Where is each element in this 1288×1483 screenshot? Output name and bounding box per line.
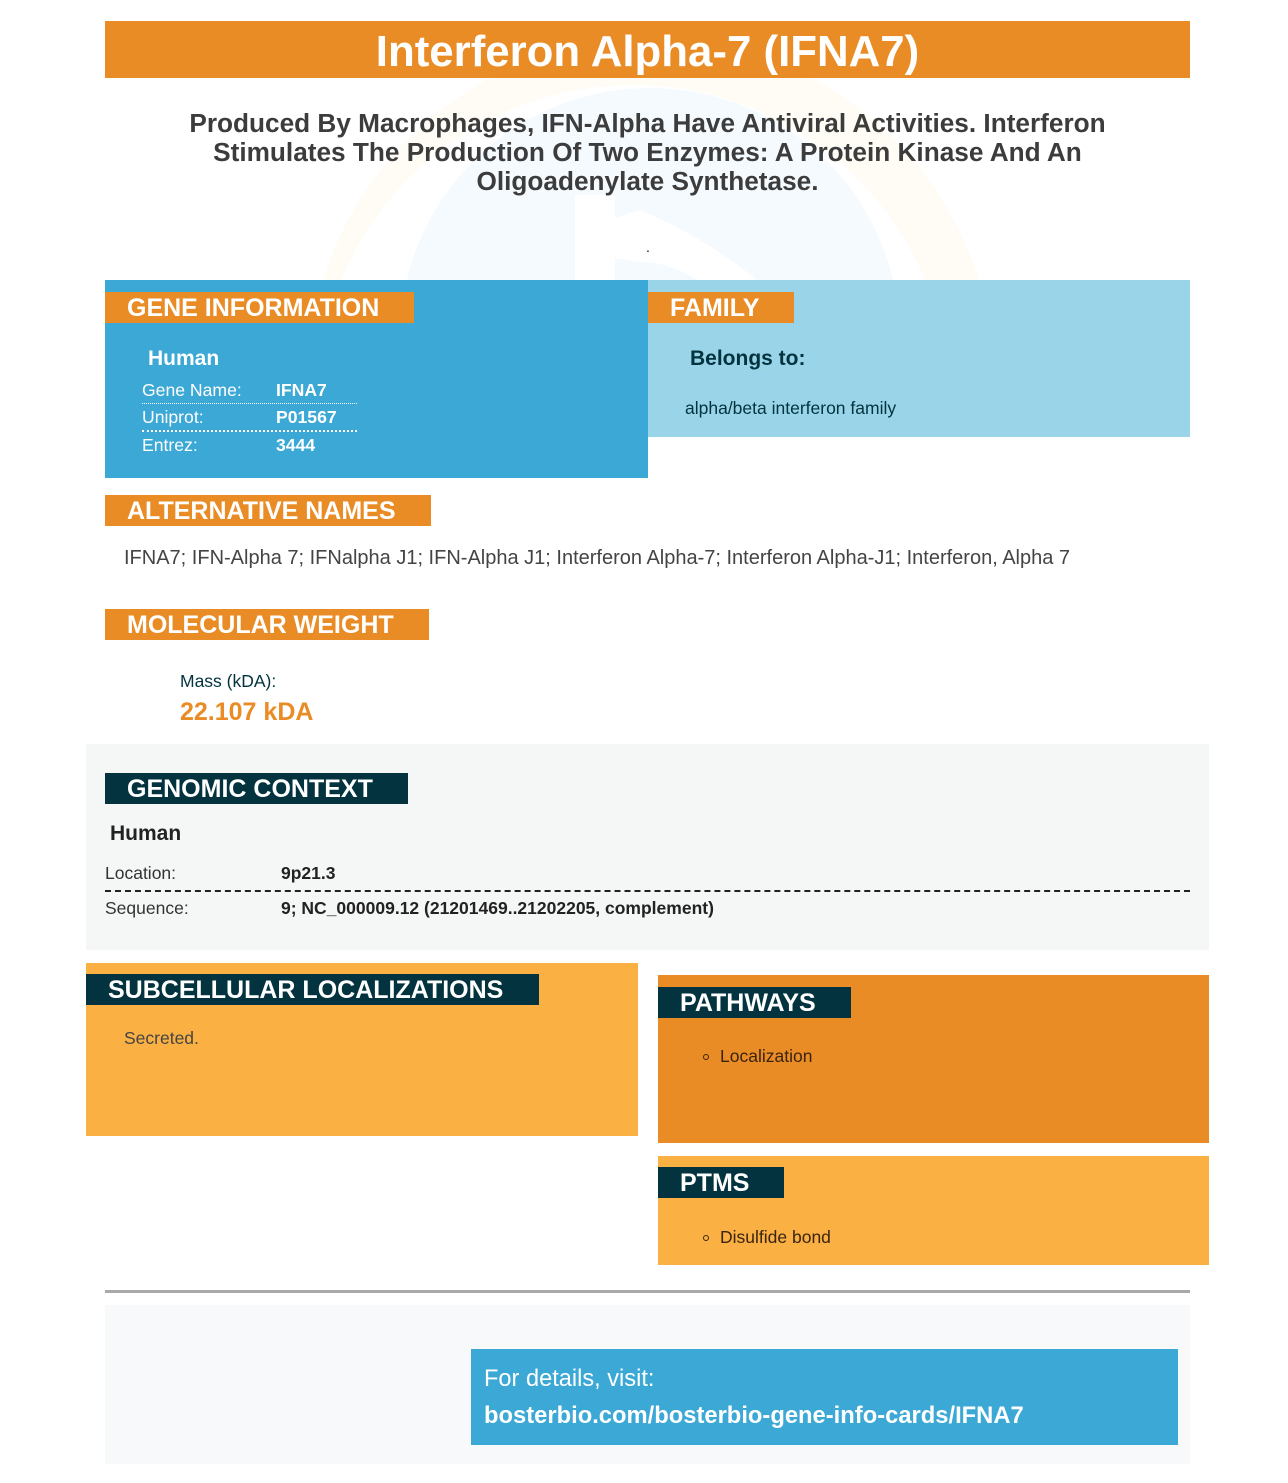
row: location: Location: bbox=[105, 863, 176, 883]
heading: pathways: PATHWAYS bbox=[680, 989, 816, 1017]
panel: genomic context bbox=[86, 744, 1209, 950]
panel: family bbox=[648, 280, 1190, 437]
subtitle bbox=[189, 108, 1106, 196]
row: entrez: Entrez: bbox=[142, 435, 198, 455]
belongs to label: Belongs to: bbox=[690, 347, 806, 370]
row: sequence: Sequence: bbox=[105, 898, 189, 918]
heading: pathways bbox=[658, 987, 851, 1018]
heading: alternative names: ALTERNATIVE NAMES bbox=[127, 497, 396, 525]
row: gene name: IFNA7 bbox=[276, 380, 327, 400]
species label: Human bbox=[148, 347, 219, 370]
subtitle: Oligoadenylate Synthetase. bbox=[476, 166, 818, 196]
heading: molecular weight: MOLECULAR WEIGHT bbox=[127, 611, 394, 639]
dot text: . bbox=[646, 239, 650, 255]
row: uniprot: Uniprot: bbox=[142, 407, 204, 427]
pathway item: Localization bbox=[720, 1046, 812, 1066]
mass value: 22.107 kDA bbox=[180, 698, 313, 726]
title banner bbox=[105, 21, 1190, 78]
watermark logo bbox=[324, 78, 978, 280]
row: sequence: 9; NC_000009.12 (21201469..21202205, complement) bbox=[281, 898, 714, 918]
heading: subcellular localizations: SUBCELLULAR LOCALIZATIONS bbox=[108, 976, 503, 1004]
row: uniprot bbox=[142, 404, 357, 432]
panel: pathways bbox=[658, 975, 1209, 1143]
heading: ptms: PTMS bbox=[680, 1169, 749, 1197]
family value: alpha/beta interferon family bbox=[685, 398, 896, 418]
alternative names text: IFNA7; IFN-Alpha 7; IFNalpha J1; IFN-Alpha J1; Interferon Alpha-7; Interferon Alpha-J1; Interferon, Alpha 7 bbox=[124, 547, 1070, 569]
title banner: Interferon Alpha-7 (IFNA7) bbox=[376, 27, 919, 76]
heading: ptms bbox=[658, 1167, 784, 1198]
subtitle: Stimulates The Production Of Two Enzymes: A Protein Kinase And An bbox=[213, 137, 1082, 167]
ptm item: Disulfide bond bbox=[720, 1227, 831, 1247]
subtitle: Produced By Macrophages, IFN-Alpha Have Antiviral Activities. Interferon bbox=[189, 108, 1106, 138]
localization text: Secreted. bbox=[124, 1028, 199, 1048]
callout label: For details, visit: bbox=[484, 1366, 654, 1392]
row: uniprot: P01567 bbox=[276, 407, 337, 427]
heading: family bbox=[648, 292, 794, 323]
row: gene name: Gene Name: bbox=[142, 380, 242, 400]
gene table bbox=[142, 380, 357, 455]
row: gene name bbox=[142, 378, 357, 404]
list bullet bbox=[703, 1235, 709, 1241]
panel: ptms bbox=[658, 1156, 1209, 1265]
footer rule bbox=[105, 1290, 1190, 1293]
row: location bbox=[105, 860, 1190, 892]
callout: details link bbox=[471, 1349, 1178, 1445]
panel: subcellular localizations bbox=[86, 963, 638, 1136]
species label: Human bbox=[110, 822, 181, 845]
list bullet bbox=[703, 1054, 709, 1060]
mass label: Mass (kDA): bbox=[180, 671, 276, 691]
heading: family: FAMILY bbox=[670, 294, 759, 322]
callout url: bosterbio.com/bosterbio-gene-info-cards/IFNA7 bbox=[484, 1402, 1024, 1429]
panel: footer bbox=[105, 1305, 1190, 1464]
panel: gene information bbox=[105, 280, 648, 478]
row: entrez: 3444 bbox=[276, 435, 315, 455]
heading: genomic context: GENOMIC CONTEXT bbox=[127, 775, 373, 803]
row: location: 9p21.3 bbox=[281, 863, 335, 883]
heading: gene information: GENE INFORMATION bbox=[127, 294, 379, 322]
row: entrez bbox=[142, 435, 316, 455]
